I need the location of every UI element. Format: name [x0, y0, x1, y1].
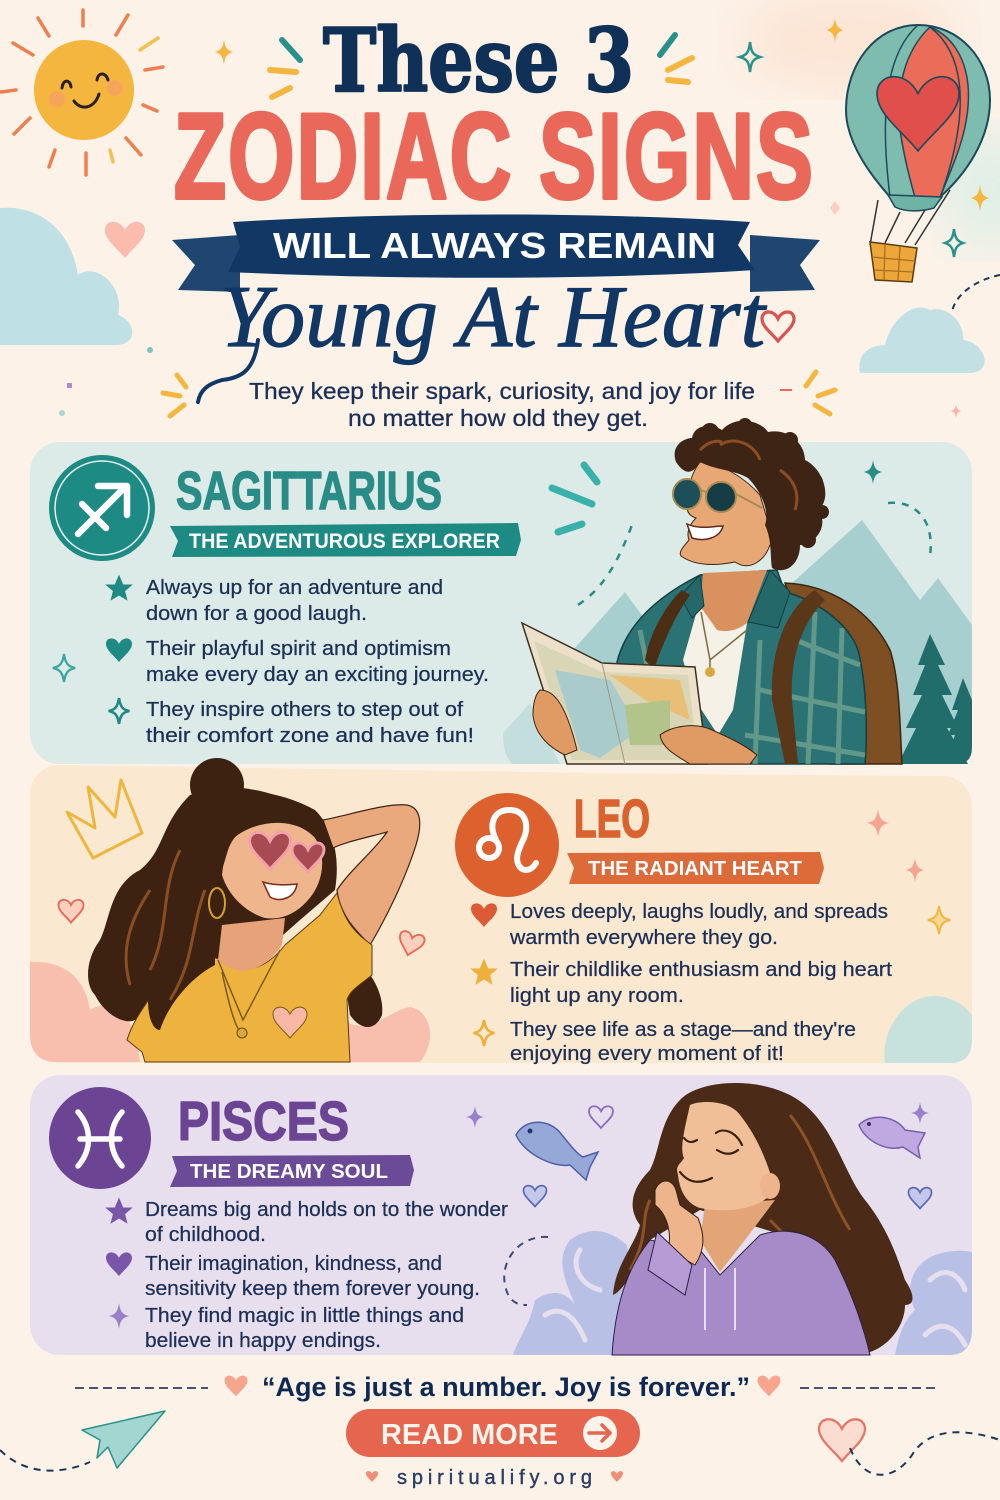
- icon: pink heart: [105, 222, 145, 258]
- bullet list: sensitivity keep them forever young.: [145, 1277, 480, 1300]
- title decorations: [270, 35, 692, 97]
- ribbon text: WILL ALWAYS REMAIN: [273, 225, 716, 266]
- sign name: LEO: [574, 789, 650, 849]
- hair behind: [88, 790, 337, 1022]
- face: [677, 1102, 775, 1210]
- icon: sparkle gold top right: [827, 18, 843, 42]
- teal cloud: [884, 996, 972, 1063]
- icon: crown: [67, 780, 142, 858]
- waves: [513, 1231, 972, 1355]
- panel background: [30, 1075, 972, 1355]
- icon: smiling sun: [1, 10, 163, 175]
- tagline banner: [567, 852, 824, 884]
- collar: [680, 570, 790, 628]
- bullet list: They inspire others to step out of: [146, 698, 463, 721]
- sign name: PISCES: [178, 1090, 349, 1152]
- hand and forearm: [655, 1181, 703, 1265]
- sunglasses: [673, 479, 762, 512]
- bullet list: Their imagination, kindness, and: [145, 1252, 442, 1275]
- map: [522, 623, 707, 764]
- dashed flight path: [952, 275, 1000, 312]
- tagline banner: [170, 1155, 414, 1187]
- yellow shirt: [127, 893, 372, 1062]
- bullet list: Their childlike enthusiasm and big heart: [510, 958, 892, 981]
- hair top and bun: [190, 787, 326, 880]
- tagline banner: THE ADVENTUROUS EXPLORER: [189, 530, 500, 553]
- hair falling over shoulder: [148, 925, 215, 1030]
- icon: hot air balloon: [846, 25, 990, 282]
- face: [222, 823, 322, 918]
- hoodie: [612, 1231, 870, 1355]
- pink clouds: [30, 962, 430, 1062]
- bullet list: enjoying every moment of it!: [510, 1042, 784, 1065]
- curly hair: [675, 421, 825, 570]
- smile: [263, 882, 297, 899]
- quote row: [75, 1372, 940, 1402]
- tagline banner: THE DREAMY SOUL: [190, 1161, 388, 1183]
- backpack: [785, 583, 902, 764]
- subtitle: no matter how old they get.: [348, 405, 648, 431]
- panel: Leo: [30, 758, 972, 1065]
- bullet list: [105, 574, 489, 747]
- raised arm: [323, 805, 420, 945]
- smile: [687, 524, 723, 540]
- icon: sparkle gold balloon: [971, 184, 989, 212]
- sign name: SAGITTARIUS: [176, 461, 442, 521]
- tagline banner: [170, 523, 521, 557]
- icon: sparkle teal: [740, 42, 760, 72]
- icon: paper plane with dashed trail: [0, 1411, 165, 1471]
- icon: sparkle teal balloon: [945, 229, 963, 257]
- subtitle: They keep their spark, curiosity, and joy for life: [249, 378, 755, 404]
- hands: [533, 690, 577, 755]
- button: read more: READ MORE: [381, 1419, 558, 1451]
- neck: [700, 1200, 775, 1272]
- sleeve cuff: [648, 1232, 692, 1295]
- bullet list: make every day an exciting journey.: [146, 663, 489, 686]
- closed eyes and smile: [680, 1131, 742, 1182]
- bullet list: [105, 1198, 508, 1352]
- fish purple: [859, 1117, 925, 1158]
- icon: cloud right: [859, 308, 985, 373]
- necklace charm: [237, 1028, 247, 1038]
- zodiac icon: Leo: [455, 793, 559, 897]
- button: read more: [346, 1409, 640, 1457]
- zodiac icon: Pisces: [49, 1087, 151, 1189]
- tagline banner: THE RADIANT HEART: [588, 858, 802, 880]
- panel: Pisces: [30, 1075, 972, 1355]
- zodiac icon: Sagittarius: [49, 455, 155, 561]
- ear: [760, 1173, 780, 1199]
- heart sunglasses: [250, 832, 324, 872]
- bullet list: Always up for an adventure and: [146, 576, 443, 599]
- subtitle: [249, 378, 755, 431]
- icon: sketched heart with dashed trail: [819, 1419, 1000, 1475]
- hearts and sparkles: [466, 1102, 932, 1305]
- heading: These 3: These 3: [323, 9, 634, 112]
- icon: cloud left: [0, 208, 132, 345]
- illustration: young man with map: [522, 418, 902, 764]
- decorative marks and dashes: [552, 460, 931, 605]
- bullet list: of childhood.: [145, 1223, 266, 1246]
- bullet list: down for a good laugh.: [146, 602, 367, 625]
- bullet list: light up any room.: [510, 984, 684, 1007]
- heading: Young At Heart script: Young At Heart: [220, 269, 768, 366]
- long hair: [613, 1083, 912, 1352]
- bullet list: believe in happy endings.: [145, 1329, 381, 1352]
- hair highlights: [126, 850, 205, 1000]
- fish blue: [516, 1122, 598, 1180]
- heading: Young At Heart script: [198, 269, 794, 402]
- illustration: woman in heart sunglasses: [88, 758, 420, 1062]
- panel background: [30, 765, 972, 1063]
- subtitle accents: [163, 372, 835, 416]
- small diamonds: [59, 201, 962, 418]
- bullet list: Dreams big and holds on to the wonder: [145, 1198, 508, 1221]
- bullet list: They see life as a stage—and they're: [510, 1018, 856, 1041]
- ribbon banner: [172, 214, 820, 292]
- bullet list: Loves deeply, laughs loudly, and spreads: [510, 900, 888, 923]
- scene: mountains and pine trees: [503, 520, 972, 764]
- icons: hearts and sparkles: [58, 809, 950, 958]
- bullet list: They find magic in little things and: [145, 1304, 464, 1327]
- icon: sparkle gold: [215, 39, 233, 65]
- icon: sparkle: [53, 654, 75, 682]
- bullet list: [470, 900, 892, 1065]
- panel background: [30, 442, 972, 764]
- white tee and neck: [683, 600, 747, 735]
- bullet list: Their playful spirit and optimism: [146, 637, 451, 660]
- plaid jacket: [617, 570, 866, 764]
- backpack straps: [645, 590, 690, 670]
- bullet list: their comfort zone and have fun!: [146, 724, 474, 747]
- face: [680, 462, 781, 566]
- quote row: “Age is just a number. Joy is forever.”: [262, 1372, 750, 1402]
- hoop earring: [209, 888, 225, 918]
- website footer: spiritualify.org: [397, 1467, 592, 1489]
- illustration: dreaming girl: [612, 1083, 912, 1355]
- bullet list: warmth everywhere they go.: [509, 926, 778, 949]
- heart on shirt: [273, 1007, 307, 1038]
- neck: [218, 918, 285, 971]
- panel: Sagittarius: [30, 418, 972, 764]
